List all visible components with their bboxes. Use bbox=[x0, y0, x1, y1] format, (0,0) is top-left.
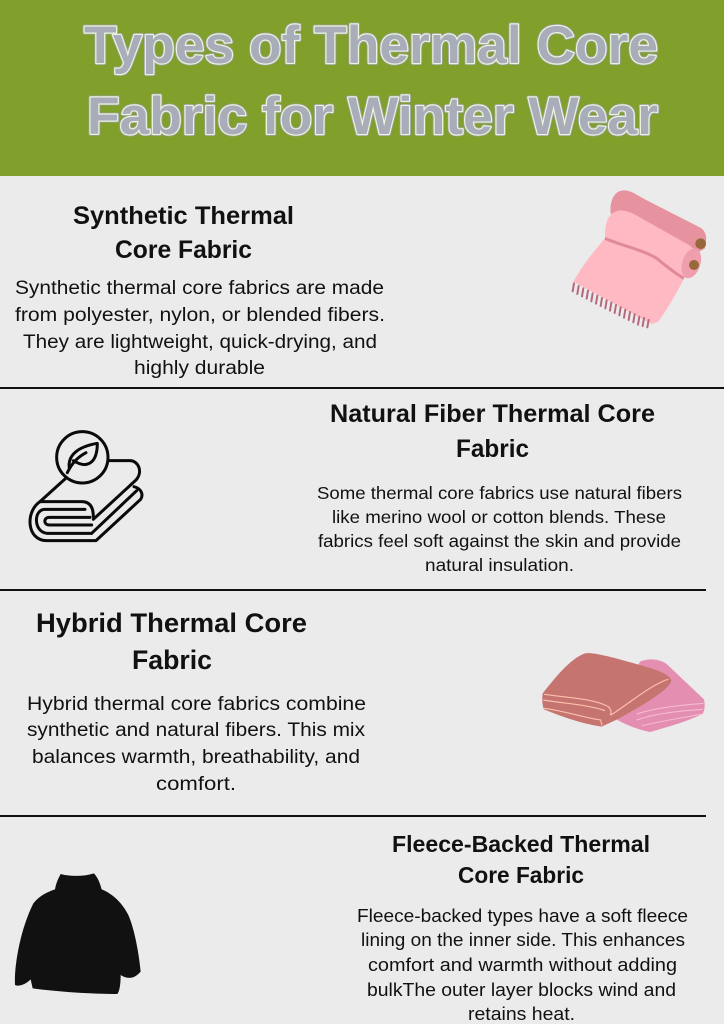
heading: synthetic: Synthetic Thermal bbox=[73, 202, 294, 230]
title: Fabric for Winter Wear bbox=[87, 87, 658, 146]
text: natural fiber description bbox=[317, 483, 682, 575]
text: synthetic description: They are lightweight, quick-drying, and bbox=[23, 332, 377, 353]
text: fleece-backed description: retains heat. bbox=[468, 1004, 575, 1024]
panel: fleece-backed bbox=[15, 831, 688, 1024]
divider bbox=[0, 815, 706, 817]
panel: natural fiber bbox=[30, 400, 682, 575]
title: Fabric for Winter Wear bbox=[87, 87, 658, 146]
heading: natural fiber: Fabric bbox=[456, 435, 529, 463]
text: synthetic description: Synthetic thermal core fabrics are made bbox=[15, 278, 384, 299]
heading: synthetic: Core Fabric bbox=[115, 236, 252, 264]
text: hybrid description: balances warmth, breathability, and bbox=[32, 747, 360, 768]
divider bbox=[0, 387, 724, 389]
text: natural fiber description: Some thermal core fabrics use natural fibers bbox=[317, 483, 682, 503]
icon: black fleece sweater bbox=[15, 873, 141, 994]
title: Types of Thermal Core bbox=[84, 16, 658, 75]
text: fleece-backed description bbox=[357, 906, 688, 1024]
heading: hybrid: Fabric bbox=[132, 645, 212, 675]
title: Types of Thermal Core bbox=[84, 16, 658, 75]
text: fleece-backed description: bulkThe outer layer blocks wind and bbox=[367, 980, 676, 1000]
panel: synthetic bbox=[15, 190, 709, 379]
heading: synthetic bbox=[73, 202, 294, 264]
text: fleece-backed description: comfort and warmth without adding bbox=[368, 955, 677, 975]
heading: natural fiber: Natural Fiber Thermal Core bbox=[330, 400, 655, 428]
text: natural fiber description: natural insulation. bbox=[425, 555, 574, 575]
text: hybrid description: comfort. bbox=[156, 774, 236, 795]
heading: hybrid: Hybrid Thermal Core bbox=[36, 608, 307, 638]
heading: hybrid bbox=[36, 608, 307, 675]
heading: fleece-backed: Core Fabric bbox=[458, 862, 584, 888]
panel: hybrid bbox=[27, 608, 705, 795]
header band bbox=[0, 0, 724, 176]
text: hybrid description: synthetic and natural fibers. This mix bbox=[27, 720, 366, 741]
text: fleece-backed description: lining on the inner side. This enhances bbox=[361, 930, 685, 950]
text: synthetic description bbox=[15, 278, 385, 379]
divider bbox=[0, 589, 706, 591]
heading: fleece-backed: Fleece-Backed Thermal bbox=[392, 831, 650, 857]
heading: natural fiber bbox=[330, 400, 655, 463]
text: synthetic description: from polyester, nylon, or blended fibers. bbox=[15, 305, 385, 326]
text: synthetic description: highly durable bbox=[134, 358, 265, 379]
icon: pink fabric roll bbox=[573, 190, 709, 327]
text: fleece-backed description: Fleece-backed types have a soft fleece bbox=[357, 906, 688, 926]
text: natural fiber description: like merino wool or cotton blends. These bbox=[332, 507, 666, 527]
heading: fleece-backed bbox=[392, 831, 650, 888]
title: Fabric for Winter Wear bbox=[87, 87, 658, 146]
text: natural fiber description: fabrics feel soft against the skin and provide bbox=[318, 531, 681, 551]
title bbox=[84, 16, 658, 146]
text: hybrid description: Hybrid thermal core fabrics combine bbox=[27, 694, 366, 715]
text: hybrid description bbox=[27, 694, 366, 795]
title: Types of Thermal Core bbox=[84, 16, 658, 75]
icon: folded fabric with leaf bbox=[30, 432, 142, 541]
icon: folded towels bbox=[542, 653, 705, 732]
